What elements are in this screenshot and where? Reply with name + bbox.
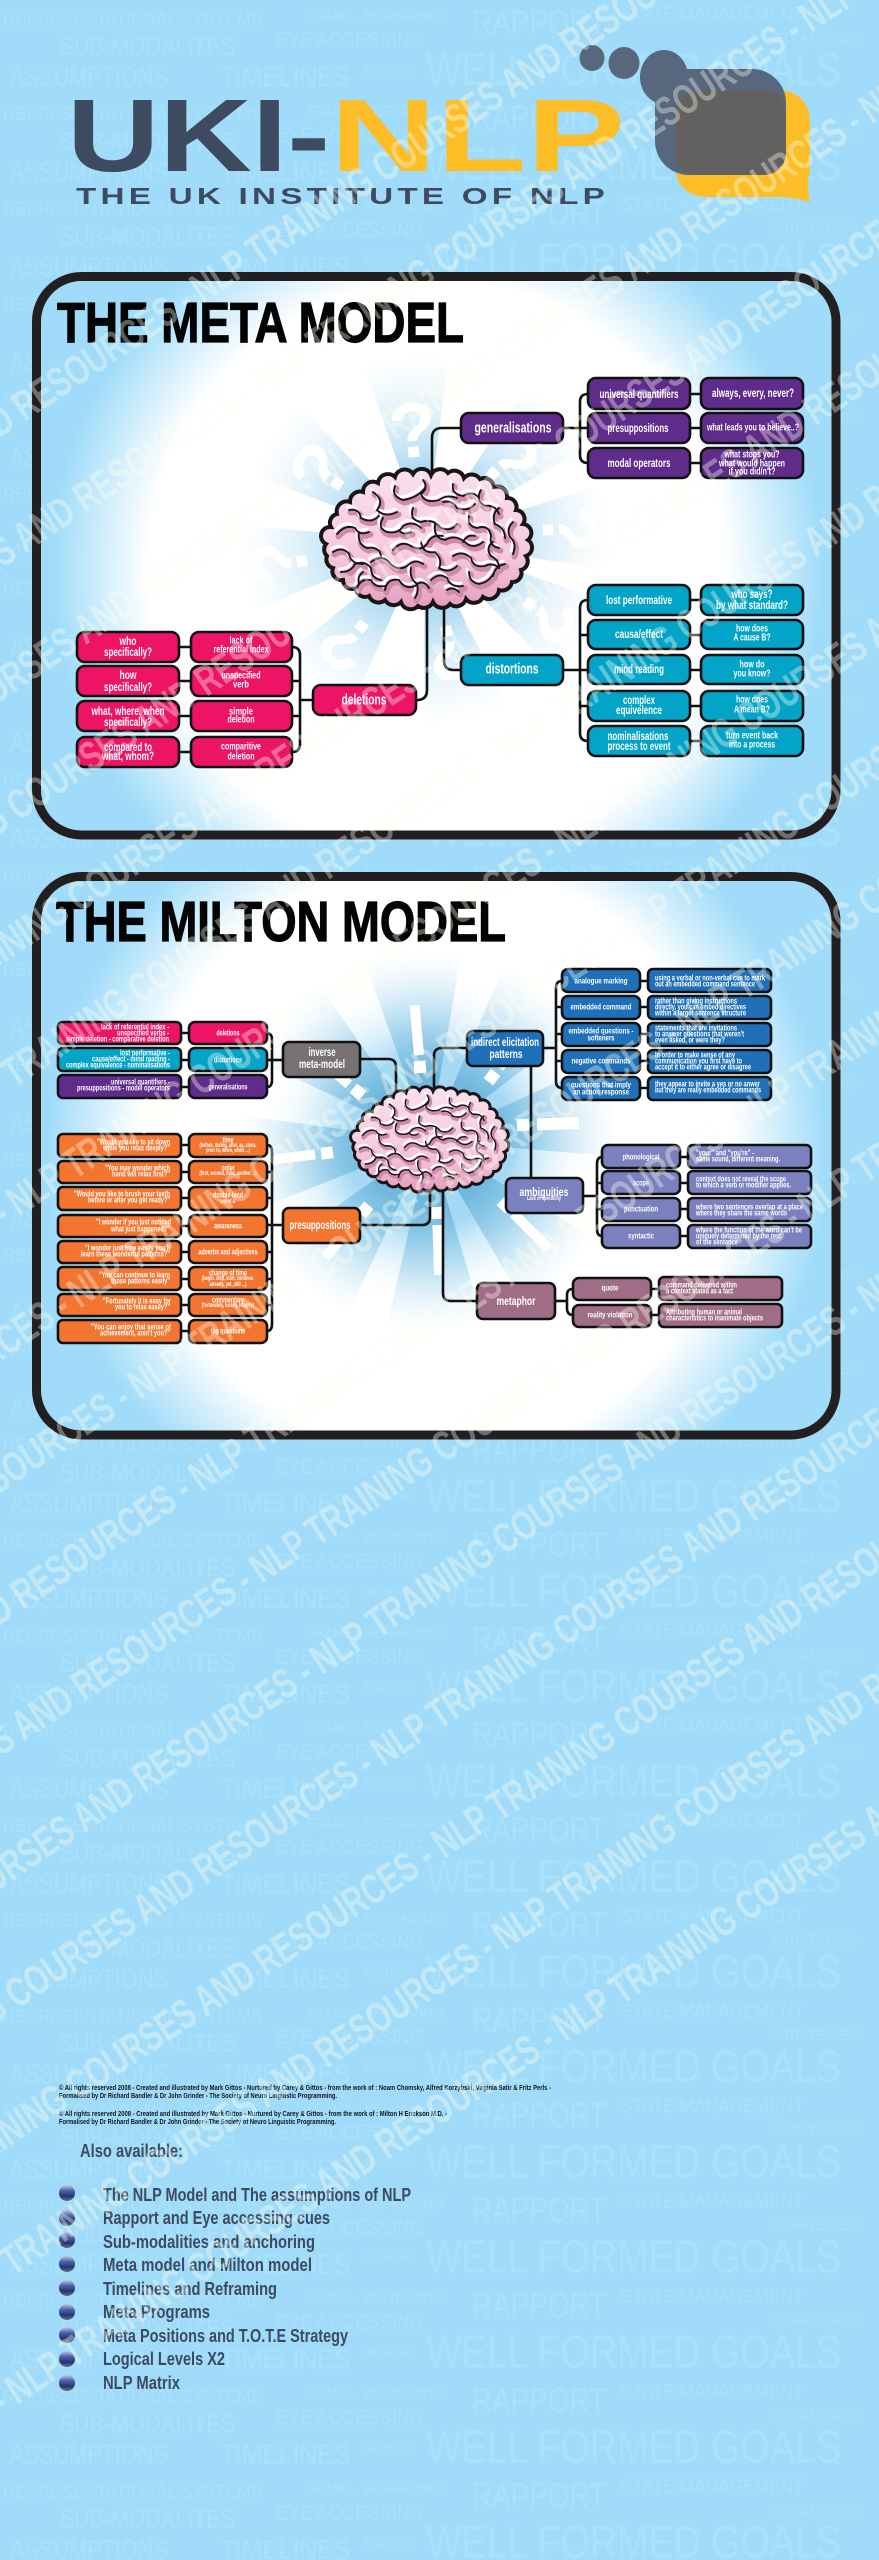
metaphor box [477,1283,555,1319]
generalisations box: generalisations [474,420,552,436]
branch: distortions [461,585,803,756]
row: complex equivelence: complex [623,693,655,707]
row: phonological [602,1145,811,1168]
row: what where when: specifically? [104,715,152,729]
row: universal quantifiers: universal quantifiers [600,387,679,401]
footer copyright notices: © All rights reserved 2008 - Created and illustrated by Mark Gittos - Nurtured by Carey & Gittos - from the work of : Noam Chomsky, Alfred Korzybski, Virginia Satir & Fritz Perls - [59,2083,551,2092]
row: adverbs and adjectives [58,1241,267,1263]
row: questions that imply: but they are really embedded commands [655,1086,761,1094]
row: what where when: what, where, when [91,704,164,718]
row: nominalisations [588,726,803,756]
logo tagline: THE UK INSTITUTE OF NLP [76,183,609,209]
row: awareness: what just happened?" [110,1224,170,1234]
branch: presuppositions [58,1134,360,1343]
row: syntactic: syntactic [628,1232,654,1240]
row: embedded questions [562,1023,771,1046]
row: negative commands [562,1050,771,1073]
row: what where when: simple [229,706,253,718]
row: embedded command: directly, you can embed directives [655,1002,746,1012]
row: embedded questions: even asked, or were they? [655,1036,725,1044]
row: commentary: "Fortunately it is easy for [103,1296,171,1306]
row: analogue marking: using a verbal or non-verbal cue to mark [655,974,765,982]
row: nominalisations: process to event [608,739,670,753]
row: reality violation: reality violation [588,1310,633,1320]
inverse meta-model box [283,1042,360,1077]
row: generalisations: presuppositions - model operators [77,1084,170,1092]
row: presuppositions: presuppositions [608,421,669,435]
ambiguities box: Lack of specificity [527,1196,561,1202]
branch: generalisations [461,378,803,478]
row: deletions: deletions [216,1028,240,1038]
row: distortions: distortions [214,1056,242,1064]
row: how specifically: specifically? [104,680,152,694]
row: embedded command: rather than giving instructions [655,996,737,1006]
row: who specifically [77,632,292,662]
row: change of time: those patterns easily" [111,1276,170,1286]
row: mind reading [588,655,803,684]
row: embedded command [562,996,771,1019]
row: reality violation: characteristics to inanimate objects [666,1314,763,1322]
row: quote [573,1277,782,1300]
row: generalisations: generalisations [208,1082,248,1092]
row: tag questions: achievement, aren't you?" [100,1328,170,1338]
row: commentary: you to relax easily?" [115,1302,170,1312]
ambiguities box [506,1178,583,1213]
row: complex equivelence: A mean B? [734,704,770,716]
row: presuppositions: what leads you to believe..? [706,422,799,434]
rays and question marks behind the brain: ? [301,594,393,692]
row: change of time: change of time [209,1268,247,1278]
list: also available titles: Logical Levels X2 [103,2349,225,2369]
row: presuppositions [588,413,803,443]
row: double bind [58,1187,267,1210]
row: generalisations [58,1075,267,1098]
row: embedded questions: softeners [588,1034,615,1042]
row: time [58,1134,267,1157]
row: syntactic: uniquely determined by the rest [696,1232,781,1240]
row: compared to: compared to [104,740,152,754]
row: complex equivelence: equivelence [616,703,662,717]
list: also available titles: Rapport and Eye accessing cues [103,2208,330,2228]
list: also available titles: Meta Programs [103,2302,210,2322]
branch: deletions [77,632,416,767]
list: also available titles: NLP Matrix [103,2373,180,2393]
rays and question marks behind the brain [233,351,879,1230]
row: tag questions [58,1320,267,1343]
row: punctuation: where they share the same words [695,1208,787,1218]
row: causa/effect [588,620,803,649]
ambiguities box: ambiguities [520,1185,569,1199]
row: change of time [58,1267,267,1290]
footer copyright notices: © All rights reserved 2008 - Created and illustrated by Mark Gittos - Nurtured by Carey & Gittos - from the work of : Milton H Erickson M.D. - [59,2109,447,2118]
row: distortions [58,1048,267,1071]
logo wordmark: UKI- [67,78,330,193]
icon: brain [351,1087,509,1192]
row: order: "You may wonder which [105,1164,170,1172]
row: compared to: comparitive [221,742,261,752]
row: lost performative: lost performative [606,593,672,607]
row: negative commands: communication you first have to [655,1056,742,1066]
row: modal operators: modal operators [608,456,671,470]
indirect elicitation patterns box: patterns [490,1047,523,1061]
row: time: prior to, when, while ...) [206,1148,250,1154]
row: universal quantifiers: always, every, never? [712,386,794,400]
heading: the meta model: THE META MODEL [57,291,464,355]
deletions box: deletions [342,692,386,708]
distortions box: distortions [486,660,538,678]
metaphor box: metaphor [496,1294,536,1308]
row: distortions: complex equivalence - nominalisations [66,1060,170,1070]
row: order [58,1161,267,1183]
footer copyright notices [59,2083,551,2126]
row: questions that imply: they appear to invite a yes or no anwer [655,1080,760,1088]
row: tag questions: tag questions [211,1326,245,1336]
panel: the meta model [36,276,879,1230]
row: quote: command delivered within [666,1280,737,1290]
heading: also available: Also available: [80,2141,183,2161]
logo wordmark [67,78,625,193]
row: generalisations: universal quantifiers - [111,1078,170,1086]
row: awareness [58,1215,267,1237]
row: change of time: "You can continue to learn [99,1270,170,1280]
row: embedded command: within a larger sentence structure [654,1008,746,1018]
row: lost performative: who says? [731,587,772,601]
list: also available titles: Timelines and Reframing [103,2279,277,2299]
row: lost performative: by what standard? [716,598,788,612]
row: order: hand will relax first?" [112,1170,170,1178]
logo: UKI-NLP [67,45,810,209]
list: also available titles: Meta Positions and T.O.T.E Strategy [103,2326,348,2346]
list: also available titles [59,2185,411,2393]
row: reality violation: Attributing human or animal [666,1308,742,1316]
row: syntactic [602,1225,811,1248]
row: who specifically: lack of [230,636,253,646]
row: causa/effect: A cause B? [734,632,770,644]
row: how specifically: how [120,668,137,682]
panel: the milton model [36,876,836,1435]
row: negative commands: In order to make sense of any [655,1050,735,1060]
row: commentary: commentary [212,1296,244,1304]
row: who specifically: who [119,634,136,648]
row: phonological: "your" and "you're" - [696,1148,754,1158]
rays and exclamation marks behind the brain [234,947,625,1333]
row: questions that imply [562,1077,771,1100]
row: causa/effect: how does [736,624,768,634]
branch: ambiguities [506,1145,811,1248]
row: scope: to which a verb or modifier applies. [696,1180,791,1190]
row: negative commands: accept it to either agree or disagree [655,1062,751,1072]
row: mind reading: mind reading [614,662,664,676]
row: double bind: before or after you get ready?" [88,1196,170,1204]
row: time: while you relax deeply?" [102,1144,170,1152]
icon: brain [321,469,532,609]
row: commentary: (fortunately, luckily, happily) [202,1303,254,1309]
row: time: (before, during, after, as, since, [200,1143,257,1149]
row: nominalisations: nominalisations [608,729,669,743]
rays and question marks behind the brain: ? [524,503,616,557]
row: quote: a context stated as a fact [666,1286,733,1296]
row: double bind: "Would you like to brush your teeth [74,1190,170,1198]
heading: the milton model: THE MILTON MODEL [56,890,506,954]
footer copyright notices: Formalised by Dr Richard Bandler & Dr John Grinder - The Society of Neuro Linguistic Programming. [59,2117,336,2126]
row: deletions: simple deletion - comparative deletion [66,1034,169,1044]
inverse meta-model box: inverse [308,1045,336,1059]
row: negative commands: negative commands [572,1056,631,1066]
branch: inverse meta-model [58,1022,360,1098]
row: compared to: what, whom? [101,749,154,763]
row: embedded command: embedded command [570,1002,632,1012]
row: analogue marking: out an embedded command sentence [655,980,755,988]
rays and question marks behind the brain: ? [497,573,597,661]
list: also available titles: The NLP Model and The assumptions of NLP [103,2185,411,2205]
row: who specifically: referential index [214,644,269,656]
row: deletions: unspecified verbs - [117,1028,169,1038]
indirect elicitation patterns box: indirect elicitation [471,1035,539,1049]
row: what where when: deletion [228,714,254,726]
row: punctuation: where two sentences overlap at a place [695,1202,803,1212]
row: analogue marking [562,969,771,992]
row: phonological: phonological [622,1152,660,1162]
row: nominalisations: into a process [729,740,775,750]
row: adverbs and adjectives: "I wonder just how easily you'll [85,1244,170,1252]
row: complex equivelence [588,691,803,721]
rays and question marks behind the brain: ? [233,533,327,593]
rays and question marks behind the brain: ? [417,605,483,701]
row: causa/effect: causa/effect [615,627,663,641]
row: double bind: one of a/ [220,1199,236,1205]
generalisations box [461,413,563,443]
row: how specifically: unspecified [222,670,260,682]
row: time: "Would you like to sit down [97,1138,170,1146]
branch: indirect elicitation patterns [467,969,771,1100]
presuppositions box [283,1208,360,1243]
row: nominalisations: turn event back [726,730,778,742]
row: complex equivelence: how does [736,694,768,706]
row: change of time: (begin, stop, start, continue, [202,1276,254,1282]
row: punctuation [602,1198,811,1221]
row: tag questions: "You can enjoy that sense of [91,1322,171,1332]
row: scope: scope [633,1178,649,1188]
deletions box [313,685,416,715]
row: modal operators: if you did/n't? [728,466,776,478]
indirect elicitation patterns box [467,1031,543,1066]
row: compared to: deletion [228,752,254,762]
row: punctuation: punctuation [624,1204,658,1214]
rays and question marks behind the brain: ? [270,426,370,514]
row: modal operators: what would happen [718,458,785,470]
row: embedded questions: embedded questions - [568,1026,634,1036]
row: change of time: already, yet, still ...) [210,1282,246,1288]
row: order: (first, second, third, another ...) [200,1171,256,1177]
row: distortions: cause/effect - mind reading - [92,1054,170,1064]
row: syntactic: where the function of the word can't be [695,1226,802,1234]
inverse meta-model box: meta-model [299,1057,345,1071]
footer copyright notices: Formalised by Dr Richard Bandler & Dr John Grinder - The Society of Neuro Linguistic Programming. [59,2091,337,2100]
row: mind reading: how do [740,660,764,670]
row: quote: quote [602,1284,619,1292]
rays and question marks behind the brain: ? [385,384,441,476]
row: how specifically: verb [233,680,249,690]
row: how specifically [77,666,292,696]
row: embedded questions: statements that are invitations [655,1024,737,1032]
row: time: time [222,1136,234,1144]
row: universal quantifiers [588,378,803,409]
row: awareness: awareness [214,1222,242,1230]
row: questions that imply: questions that imply [571,1080,631,1090]
logo wordmark: NLP [330,78,625,193]
row: scope [602,1171,811,1194]
row: commentary [58,1294,267,1316]
row: questions that imply: an action response [573,1088,629,1096]
row: what where when [77,701,292,731]
branch: metaphor [477,1277,782,1327]
row: analogue marking: analogue marking [574,976,628,986]
row: adverbs and adjectives: learn these wonderful patterns?" [81,1250,170,1258]
row: mind reading: you know? [734,668,770,680]
row: embedded questions: to answer questions that weren't [655,1030,744,1038]
presuppositions box: presuppositions [290,1218,351,1232]
list: also available titles: Meta model and Milton model [103,2255,312,2275]
row: syntactic: of the sentence [696,1238,738,1246]
row: adverbs and adjectives: adverbs and adjectives [198,1248,258,1256]
row: compared to [77,737,292,767]
row: scope: context does not reveal the scope [696,1174,786,1184]
distortions box [461,655,563,685]
row: order: order [222,1164,234,1172]
row: modal operators: what stops you? [724,450,780,460]
row: deletions [58,1022,267,1044]
row: distortions: lost performative - [120,1048,170,1058]
connector lines: meta model [179,394,701,752]
connector lines: milton model [181,981,688,1331]
row: lost performative [588,585,803,615]
icon: thought bubbles and speech bubble [580,45,810,202]
row: reality violation [573,1304,782,1327]
row: deletions: lack of referential index - [101,1022,169,1032]
row: awareness: "I wonder if you just noticed [96,1218,171,1226]
rays and question marks behind the brain: ? [462,413,558,507]
row: double bind: double bind [213,1190,243,1200]
row: phonological: same sound, different meaning. [696,1154,780,1164]
row: who specifically: specifically? [104,645,152,659]
list: also available titles: Sub-modalities and anchoring [103,2232,315,2252]
row: modal operators [588,448,803,478]
